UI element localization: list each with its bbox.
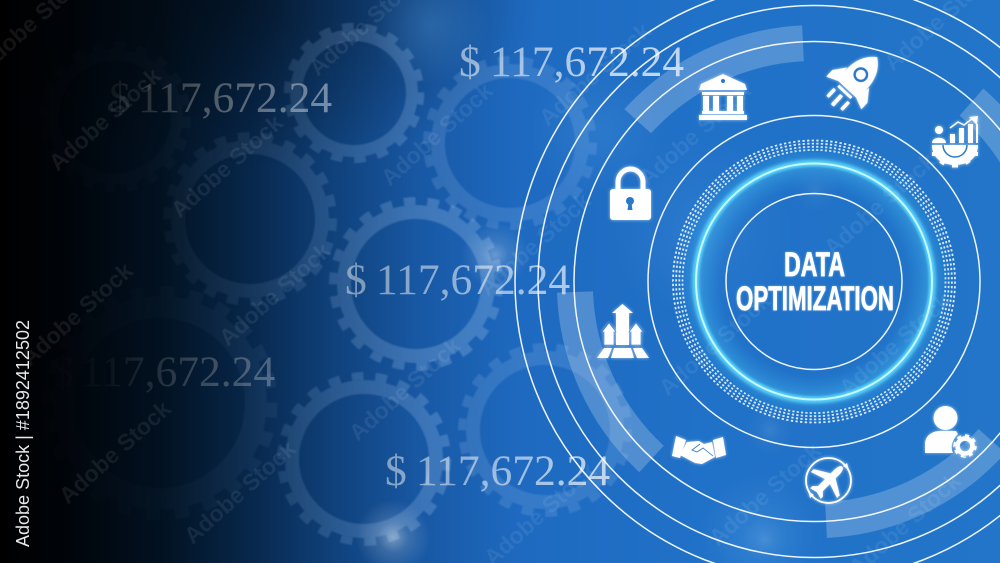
amount 2: $ [109,74,131,122]
watermarks: Adobe Stock [704,437,826,551]
amount 5: 117,672.24 [416,447,610,495]
watermarks: Adobe Stock [819,147,941,261]
icon: rocket [815,41,895,122]
title: data optimization: OPTIMIZATION [736,280,894,318]
icon: user with gear [925,406,976,456]
gears [172,22,632,546]
watermarks: Adobe Stock [16,257,138,371]
gear top centre [287,26,421,160]
light flares [355,166,839,563]
watermarks: Adobe Stock [54,395,176,509]
amount 2: 117,672.24 [138,74,332,122]
watermarks: Adobe Stock [474,187,596,301]
concentric rings [515,0,1000,563]
amount 4: 117,672.24 [81,348,275,396]
watermarks: Adobe Stock [166,109,288,223]
glowing ring [678,146,950,418]
watermarks: Adobe Stock [834,287,956,401]
icon: bank [699,74,747,120]
gear middle left [167,136,333,302]
icon: airplane in circle [802,454,855,507]
translucent arcs [575,43,1000,520]
gear top left dark [43,45,187,189]
watermarks: Adobe Stock [534,17,656,131]
icon: handshake [672,436,726,464]
icon: chart with gear [932,116,978,168]
amount 1: 117,672.24 [490,38,684,86]
gear bottom centre [281,376,447,542]
watermarks: Adobe Stock [44,62,166,176]
gear bottom right [462,347,628,513]
amount 3: $ [345,256,367,304]
watermarks: Adobe Stock [376,77,498,191]
watermarks: Adobe Stock [214,237,336,351]
watermarks: Adobe Stock [654,287,776,401]
amount 4: $ [52,348,74,396]
dollar amounts [52,38,684,495]
dotted ring [673,140,955,422]
amount 3: 117,672.24 [376,256,570,304]
vertical credit: adobe stock id: Adobe Stock | #1892412502 [13,320,33,547]
title: data optimization [736,246,894,318]
gear centre [333,201,499,367]
watermarks: Adobe Stock [179,435,301,549]
watermarks: Adobe Stock [634,77,756,191]
amount 1: $ [459,38,481,86]
title: data optimization: DATA [784,246,845,284]
amount 5: $ [385,447,407,495]
watermarks: Adobe Stock [344,332,466,446]
icon: growth arrows [597,304,649,358]
gear top right [427,60,593,226]
icon: padlock [610,169,651,220]
gear bottom left large [224,306,277,492]
